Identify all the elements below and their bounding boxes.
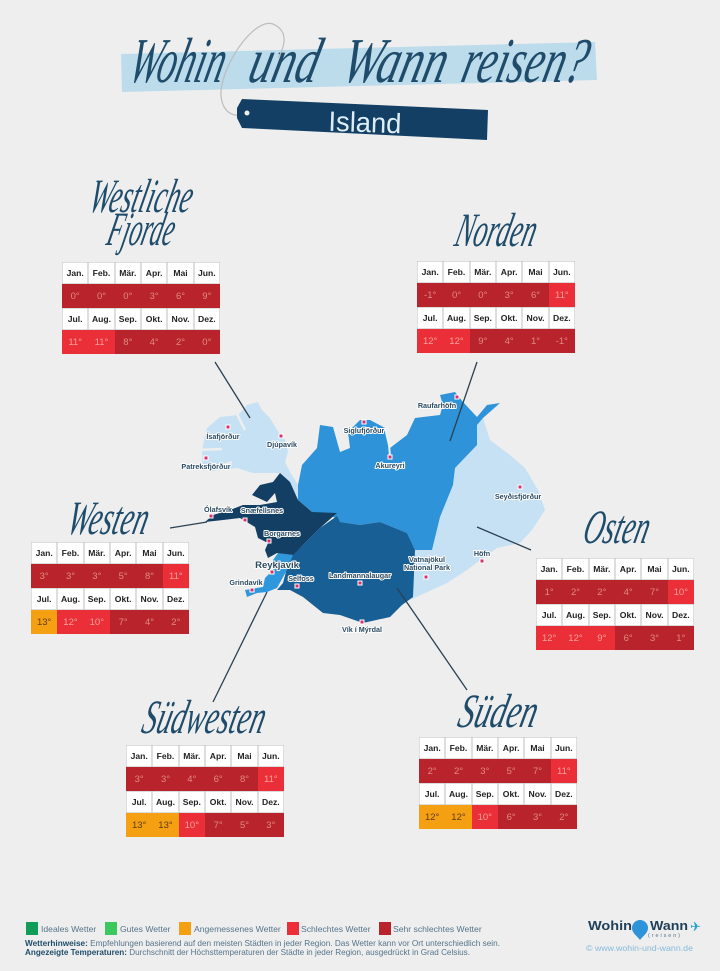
table: Westen: 8°	[145, 570, 154, 582]
table: Süden: 2°	[454, 766, 463, 776]
region: Westliche Fjorde	[202, 402, 298, 500]
city labels: Seyðisfjörður	[495, 492, 541, 501]
table: Süden: 2°	[428, 766, 437, 776]
table: Osten: 3°	[650, 632, 659, 644]
table: Norden: 1°	[531, 336, 540, 346]
table: Westen: 2°	[171, 616, 180, 628]
table: Südwesten: Nov.	[236, 797, 253, 807]
table: Osten	[536, 558, 694, 650]
table: Osten: 6°	[624, 632, 633, 644]
table: Norden: Jun.	[553, 267, 571, 277]
table: Südwesten: Aug.	[156, 797, 175, 807]
luggage tag string	[221, 23, 284, 115]
table: Westen: 12°	[63, 616, 78, 628]
heading: Süden: Süden	[453, 685, 545, 738]
table: Süden: Jul.	[425, 789, 440, 799]
table: Osten: 10°	[674, 586, 688, 598]
table: Norden: Jan.	[422, 267, 439, 277]
table: Südwesten: 11°	[264, 774, 278, 784]
city labels: Djúpavík	[267, 440, 297, 449]
table: Südwesten: 13°	[132, 820, 146, 830]
luggage tag: Island	[237, 99, 488, 140]
table: Norden	[417, 261, 575, 353]
table: Osten: 4°	[624, 586, 633, 598]
table: Südwesten: Jun.	[262, 751, 280, 761]
table: Westen: 3°	[66, 570, 75, 582]
table: Norden: Aug.	[447, 313, 466, 323]
table: Südwesten: Dez.	[262, 797, 280, 807]
table: Westen: Jan.	[36, 548, 53, 558]
city labels: Vatnajökul	[409, 555, 445, 564]
table: Osten: 9°	[597, 632, 606, 644]
table: Norden: 12°	[449, 336, 464, 346]
table: Norden: 3°	[505, 290, 514, 300]
table: Westen: Jul.	[37, 594, 52, 604]
table: Osten: 12°	[542, 632, 556, 644]
table: Osten: 12°	[568, 632, 583, 644]
legend: Sehr schlechtes Wetter	[393, 924, 482, 934]
table: Südwesten: 4°	[187, 774, 196, 784]
table: Westliche Fjorde: 11°	[68, 336, 82, 348]
table: Osten: Mär.	[593, 564, 610, 574]
heading: Osten: Osten	[578, 501, 657, 554]
table: Osten: Jun.	[672, 564, 690, 574]
table: Westliche Fjorde: 0°	[123, 290, 132, 302]
table: Norden: 9°	[478, 336, 487, 346]
region: Osten	[410, 418, 545, 600]
table: Westen: 3°	[40, 570, 49, 582]
table: Westen: Apr.	[115, 548, 132, 558]
title: und	[242, 26, 329, 97]
table: Westliche Fjorde: Nov.	[172, 314, 189, 324]
table: Südwesten: Jul.	[132, 797, 147, 807]
city labels: Vík í Mýrdal	[342, 625, 382, 634]
table: Norden: Nov.	[526, 313, 544, 323]
table: Osten: 7°	[650, 586, 659, 598]
table: Süden	[419, 737, 577, 829]
table: Norden: Okt.	[501, 313, 518, 323]
table: Norden: -1°	[424, 290, 436, 300]
logo: Wohin und Wann: Wann	[650, 918, 688, 933]
table: Westliche Fjorde: Dez.	[198, 314, 216, 324]
table: Westliche Fjorde: Mär.	[119, 268, 136, 278]
table: Südwesten: 5°	[240, 820, 249, 830]
table: Norden: 0°	[478, 290, 487, 300]
table: Südwesten: Mai	[237, 751, 252, 761]
table: Osten: Nov.	[646, 610, 663, 620]
table: Süden: Mai	[530, 743, 545, 753]
table: Westliche Fjorde: 11°	[95, 336, 108, 348]
region: Norden	[298, 392, 500, 550]
table: Westen: Dez.	[167, 594, 185, 604]
logo: Wohin und Wann: ✈	[690, 920, 701, 935]
table: Norden: Mär.	[474, 267, 491, 277]
table: Osten: Sep.	[593, 610, 611, 620]
city labels: Reykjavík	[255, 560, 300, 571]
city labels: Landmannalaugar	[329, 571, 391, 580]
table: Westen: Jun.	[167, 548, 185, 558]
title: Wann	[335, 26, 457, 97]
table: Süden: Mär.	[476, 743, 493, 753]
weather notes: Wetterhinweise: Empfehlungen basierend auf den meisten Städten in jeder Region. Das Wetter kann vor Ort unterschiedlich sein.	[25, 939, 500, 948]
title: reisen?	[455, 26, 597, 97]
table: Süden: Sep.	[476, 789, 494, 799]
table: Westen: 11°	[169, 570, 183, 582]
table: Osten: Dez.	[672, 610, 690, 620]
table: Westliche Fjorde: 2°	[176, 336, 185, 348]
table: Südwesten: Feb.	[157, 751, 174, 761]
heading: Westen: Westen	[62, 492, 156, 545]
region: Westen	[205, 473, 337, 558]
table: Osten: 1°	[545, 586, 554, 598]
table: Westliche Fjorde: 6°	[176, 290, 185, 302]
weather notes: Angezeigte Temperaturen: Durchschnitt der Höchsttemperaturen der Städte in jeder Region, ausgedrückt in Grad Celsius.	[25, 948, 470, 957]
table: Süden: Jun.	[555, 743, 573, 753]
legend	[26, 922, 482, 935]
table: Westen: Okt.	[115, 594, 132, 604]
table: Westliche Fjorde: Jul.	[68, 314, 83, 324]
table: Süden: 12°	[425, 812, 439, 822]
table: Westliche Fjorde: 3°	[150, 290, 159, 302]
luggage tag: Island: Island	[328, 106, 402, 139]
logo: Wohin und Wann	[586, 918, 701, 953]
table: Westliche Fjorde: 0°	[71, 290, 80, 302]
table: Westen: Sep.	[88, 594, 106, 604]
city labels: Borgarnes	[264, 529, 300, 538]
legend: Angemessenes Wetter	[194, 924, 281, 934]
table: Süden: Aug.	[449, 789, 468, 799]
table: Norden: 4°	[505, 336, 514, 346]
table: Westen: 3°	[92, 570, 101, 582]
table: Westliche Fjorde: Jan.	[67, 268, 84, 278]
city labels: Ólafsvík	[204, 505, 232, 514]
legend: Ideales Wetter	[41, 924, 96, 934]
table: Norden: 0°	[452, 290, 461, 300]
table: Süden: 10°	[478, 812, 492, 822]
table: Südwesten: Sep.	[183, 797, 201, 807]
city labels: Grindavík	[229, 578, 263, 587]
table: Westliche Fjorde: 8°	[123, 336, 132, 348]
table: Norden: 6°	[531, 290, 540, 300]
table: Westen: Nov.	[140, 594, 158, 604]
table: Norden: Apr.	[501, 267, 518, 277]
table: Süden: Dez.	[555, 789, 573, 799]
table: Osten: Apr.	[620, 564, 637, 574]
heading: Westliche Fjorde	[84, 170, 200, 256]
table: Westen: 7°	[119, 616, 128, 628]
table: Westen	[31, 542, 189, 634]
table: Süden: 2°	[559, 812, 568, 822]
connector lines from headings to regions	[170, 362, 531, 702]
table: Südwesten: 10°	[185, 820, 199, 830]
city labels: Raufarhöfn	[418, 401, 456, 410]
table: Südwesten: 7°	[214, 820, 223, 830]
table: Norden: Mai	[528, 267, 543, 277]
icon: map pin	[632, 920, 648, 940]
fjord inlets	[198, 412, 245, 473]
table: Süden: 12°	[451, 812, 466, 822]
table: Süden: Jan.	[424, 743, 441, 753]
heading: Südwesten: Südwesten	[137, 691, 273, 744]
table: Südwesten: Okt.	[210, 797, 227, 807]
city labels	[181, 401, 541, 634]
table: Westen: 13°	[37, 616, 51, 628]
table: Süden: 5°	[507, 766, 516, 776]
table: Süden: Feb.	[450, 743, 467, 753]
table: Norden: Sep.	[474, 313, 492, 323]
title: Wohin	[122, 26, 235, 97]
table: Süden: 3°	[533, 812, 542, 822]
city labels: Ísafjörður	[206, 432, 240, 441]
logo: Wohin und Wann: (reisen)	[648, 933, 680, 939]
table: Norden: Jul.	[423, 313, 438, 323]
heading: Westliche Fjorde: Westliche	[84, 170, 200, 223]
title	[122, 26, 597, 97]
table: Südwesten: 3°	[161, 774, 170, 784]
table: Westen: 10°	[90, 616, 104, 628]
heading: Westliche Fjorde: Fjorde	[102, 203, 182, 256]
fjord near Akureyri	[385, 428, 390, 456]
table: Süden: 11°	[557, 766, 571, 776]
legend: Schlechtes Wetter	[301, 924, 371, 934]
table: Südwesten: 3°	[266, 820, 275, 830]
table: Osten: 2°	[597, 586, 606, 598]
table: Südwesten: Apr.	[210, 751, 227, 761]
logo: Wohin und Wann: Wohin	[588, 918, 632, 933]
title band	[121, 42, 597, 92]
table: Westliche Fjorde: Apr.	[146, 268, 163, 278]
logo: Wohin und Wann: © www.wohin-und-wann.de	[586, 943, 693, 953]
table: Südwesten: 13°	[158, 820, 173, 830]
table: Westen: 4°	[145, 616, 154, 628]
table: Westliche Fjorde: Aug.	[92, 314, 111, 324]
table: Westliche Fjorde: Okt.	[146, 314, 163, 324]
table: Süden: 7°	[533, 766, 542, 776]
city labels: Akureyri	[375, 461, 405, 470]
city labels: National Park	[404, 563, 450, 572]
table: Südwesten	[126, 745, 284, 837]
table: Osten: 2°	[571, 586, 580, 598]
city labels: Siglufjörður	[344, 426, 385, 435]
table: Westliche Fjorde: Jun.	[198, 268, 216, 278]
table: Osten: Jul.	[542, 610, 557, 620]
legend: Gutes Wetter	[120, 924, 171, 934]
table: Süden: 6°	[507, 812, 516, 822]
table: Westliche Fjorde	[62, 262, 220, 354]
city labels: Selfoss	[288, 574, 314, 583]
city labels: Snæfellsnes	[241, 506, 283, 515]
table: Süden: Nov.	[528, 789, 546, 799]
table: Norden: 11°	[555, 290, 569, 300]
table: Westliche Fjorde: 4°	[150, 336, 159, 348]
table: Osten: Jan.	[541, 564, 558, 574]
table: Westliche Fjorde: Feb.	[93, 268, 110, 278]
table: Norden: 12°	[423, 336, 437, 346]
heading: Norden: Norden	[450, 204, 544, 257]
table: Südwesten: 6°	[214, 774, 223, 784]
region: Südwesten	[245, 553, 293, 597]
city labels: Höfn	[474, 549, 490, 558]
table: Osten: Mai	[647, 564, 662, 574]
city markers	[204, 395, 522, 624]
table: Westliche Fjorde: 0°	[202, 336, 211, 348]
table: Westen: Mai	[142, 548, 157, 558]
table: Westliche Fjorde: Sep.	[119, 314, 137, 324]
table: Osten: 1°	[676, 632, 685, 644]
table: Süden: 3°	[480, 766, 489, 776]
table: Osten: Feb.	[567, 564, 584, 574]
table: Westen: Feb.	[62, 548, 79, 558]
table: Südwesten: Mär.	[183, 751, 200, 761]
table: Norden: -1°	[556, 336, 568, 346]
table: Osten: Okt.	[620, 610, 637, 620]
table: Süden: Apr.	[503, 743, 520, 753]
table: Westliche Fjorde: 0°	[97, 290, 106, 302]
table: Westen: Mär.	[88, 548, 105, 558]
table: Südwesten: 8°	[240, 774, 249, 784]
table: Osten: Aug.	[566, 610, 585, 620]
region: Süden	[277, 516, 415, 623]
table: Westen: 5°	[119, 570, 128, 582]
table: Süden: Okt.	[503, 789, 520, 799]
table: Südwesten: 3°	[135, 774, 144, 784]
city labels: Patreksfjörður	[181, 462, 231, 471]
table: Südwesten: Jan.	[131, 751, 148, 761]
table: Norden: Dez.	[553, 313, 571, 323]
weather notes	[25, 939, 500, 957]
table: Westen: Aug.	[61, 594, 80, 604]
table: Westliche Fjorde: Mai	[173, 268, 188, 278]
table: Westliche Fjorde: 9°	[202, 290, 211, 302]
map of Iceland	[181, 392, 545, 634]
table: Norden: Feb.	[448, 267, 465, 277]
